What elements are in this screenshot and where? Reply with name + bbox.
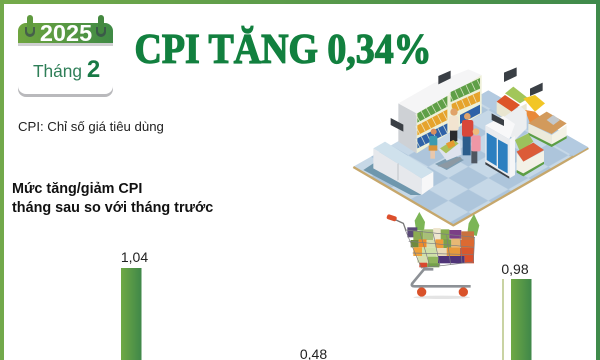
cart leaves [415, 212, 479, 236]
calendar badge [18, 15, 113, 97]
cart basket wire [405, 230, 475, 268]
produce stands [497, 87, 567, 176]
shopper: man in red shirt [462, 113, 473, 155]
calendar year: 2025 [40, 20, 92, 46]
subtitle: CPI definition: CPI: Chỉ số giá tiêu dùng [18, 119, 164, 134]
shelf product gaps [417, 83, 480, 143]
bar: 1,04 [121, 249, 148, 360]
calendar month: Tháng 2 [33, 56, 100, 83]
bar chart [121, 249, 532, 360]
shopper: man in cream shirt [449, 108, 459, 143]
store floor [353, 90, 588, 225]
bar: 1,04: 1,04 [121, 249, 148, 265]
shopper: woman in teal [429, 129, 437, 159]
illustration: supermarket [353, 67, 588, 225]
illustration: shopping cart [386, 212, 479, 299]
freezers [373, 142, 433, 195]
bar: 0,98: 0,98 [501, 261, 529, 277]
store signs [391, 67, 543, 132]
trolley [437, 140, 462, 168]
drinks fridge [485, 106, 527, 179]
calendar rings [25, 15, 106, 37]
title: CPI TĂNG 0,34% [134, 26, 432, 73]
bar: 0,98 [501, 261, 532, 360]
cart wheels and frame [386, 214, 471, 299]
shopper: woman in pink [471, 128, 481, 163]
chart heading: Mức tăng/giảm CPI [12, 181, 142, 197]
fridge sign [492, 113, 504, 126]
left shelves [398, 69, 482, 153]
shoppers and trolley [429, 108, 481, 168]
chart heading: tháng sau so với tháng trước [12, 200, 213, 216]
cart produce [407, 227, 474, 267]
